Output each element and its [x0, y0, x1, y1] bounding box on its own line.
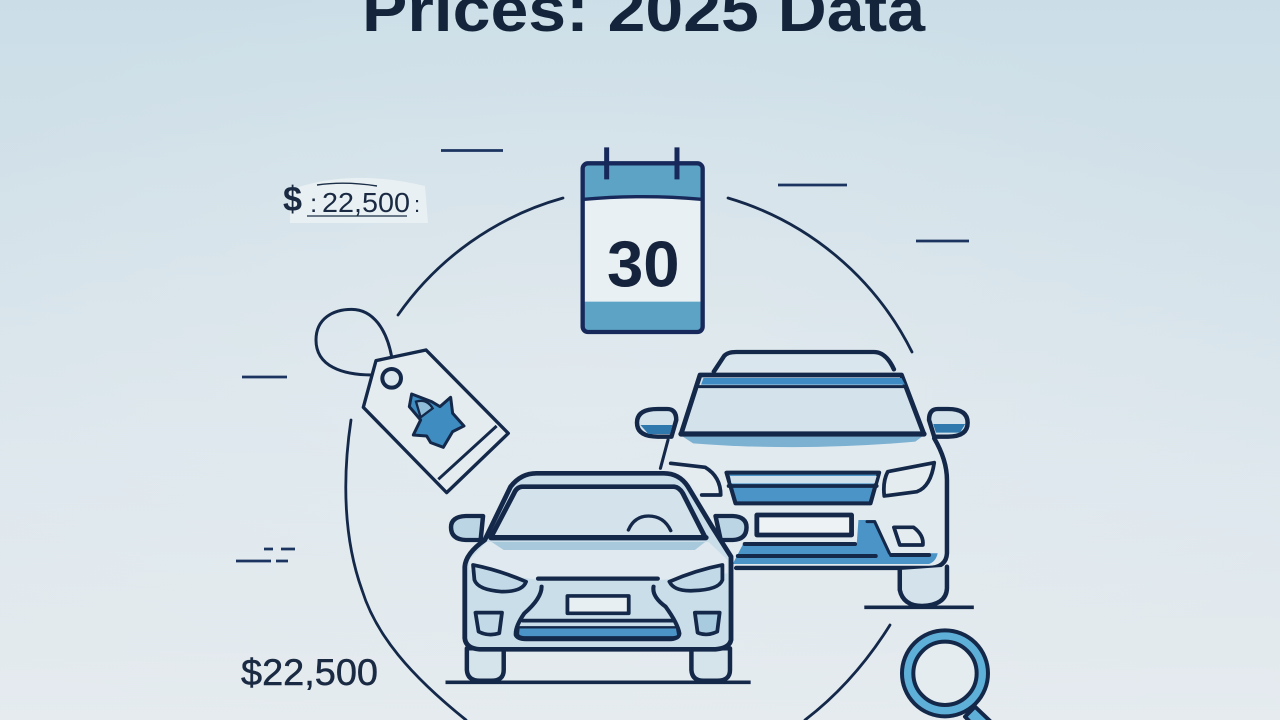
plate: rear car — [757, 515, 852, 535]
wheel: rear car — [900, 567, 947, 606]
icon: calendar — [583, 147, 703, 332]
icon: calendar: 30 — [607, 228, 680, 301]
wheels: front car — [467, 648, 504, 681]
price label: top — [283, 178, 428, 223]
icon: front car — [446, 473, 751, 682]
price label: top: : — [414, 192, 420, 217]
floating accent dashes — [236, 150, 969, 561]
circular ring arcs — [346, 198, 912, 720]
plate: front car — [567, 596, 629, 613]
roof: rear car — [714, 352, 894, 372]
windshield: front car — [491, 487, 705, 537]
price label: top: $ — [283, 180, 302, 219]
lower bumper: rear car — [733, 520, 938, 564]
headlights: rear car — [671, 463, 721, 495]
headlights: front car — [473, 565, 526, 592]
icon: price tag — [316, 309, 508, 493]
fog lights: front car — [475, 613, 502, 635]
hood shade: front car — [469, 542, 728, 580]
mirrors: rear car — [637, 409, 676, 437]
car body: rear car — [660, 435, 946, 567]
windshield: rear car — [681, 375, 924, 434]
icon: magnifying glass — [908, 636, 1013, 720]
grille: rear car — [727, 473, 879, 503]
price label: top: 22,500 — [322, 187, 410, 218]
price label: top: : — [310, 188, 317, 218]
price label: bottom: $22,500 — [241, 652, 378, 693]
icon: rear car — [637, 352, 974, 607]
lower grille: front car — [516, 587, 679, 639]
upper grille line: front car — [538, 572, 658, 585]
body: front car — [465, 473, 731, 649]
ground: rear car — [864, 602, 974, 613]
ground: front car — [446, 677, 751, 688]
mirrors: front car — [451, 516, 483, 540]
